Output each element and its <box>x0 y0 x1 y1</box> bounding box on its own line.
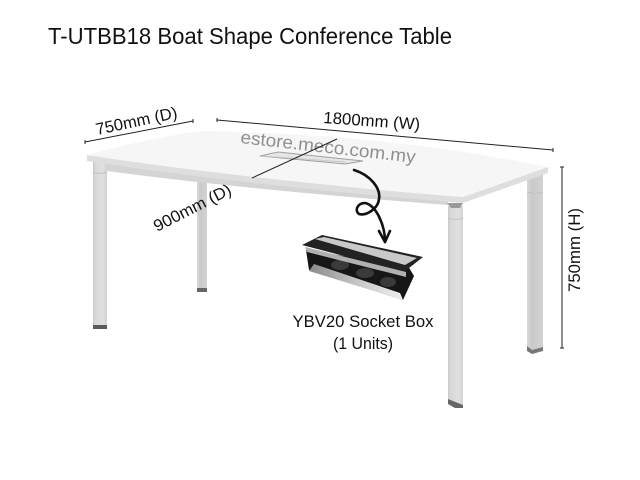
label: 900mm (D): 900mm (D) <box>151 181 235 236</box>
cable tray slot <box>260 152 363 164</box>
curly arrow <box>354 170 390 242</box>
box body <box>306 250 414 300</box>
dimension line: depth across table <box>252 139 337 178</box>
front left leg <box>93 158 107 329</box>
label: 750mm (D): 750mm (D) <box>94 104 179 139</box>
dimension line: depth top <box>85 119 193 144</box>
front right leg <box>447 203 463 408</box>
box interior sockets <box>331 260 396 287</box>
dimension line: width <box>217 118 553 152</box>
box lid frame <box>302 235 423 272</box>
table top surface <box>87 131 548 197</box>
box front flap <box>309 264 403 300</box>
socket box <box>302 235 423 300</box>
label: 1800mm (W): 1800mm (W) <box>323 109 421 134</box>
under-table rail <box>107 160 448 205</box>
title: T-UTBB18 Boat Shape Conference Table <box>48 23 452 49</box>
socket box caption: (1 Units) <box>333 335 393 353</box>
watermark: estore.meco.com.my <box>240 127 417 167</box>
table illustration <box>87 131 548 408</box>
socket box caption: YBV20 Socket Box <box>292 313 434 331</box>
back right leg <box>527 170 543 354</box>
socket box caption <box>292 313 434 353</box>
label: 750mm (H): 750mm (H) <box>566 208 584 292</box>
table top edge <box>87 155 548 203</box>
dimension line: height <box>560 167 564 348</box>
box front lip <box>305 247 406 277</box>
back left leg <box>197 172 207 292</box>
box lid surface <box>315 237 417 265</box>
